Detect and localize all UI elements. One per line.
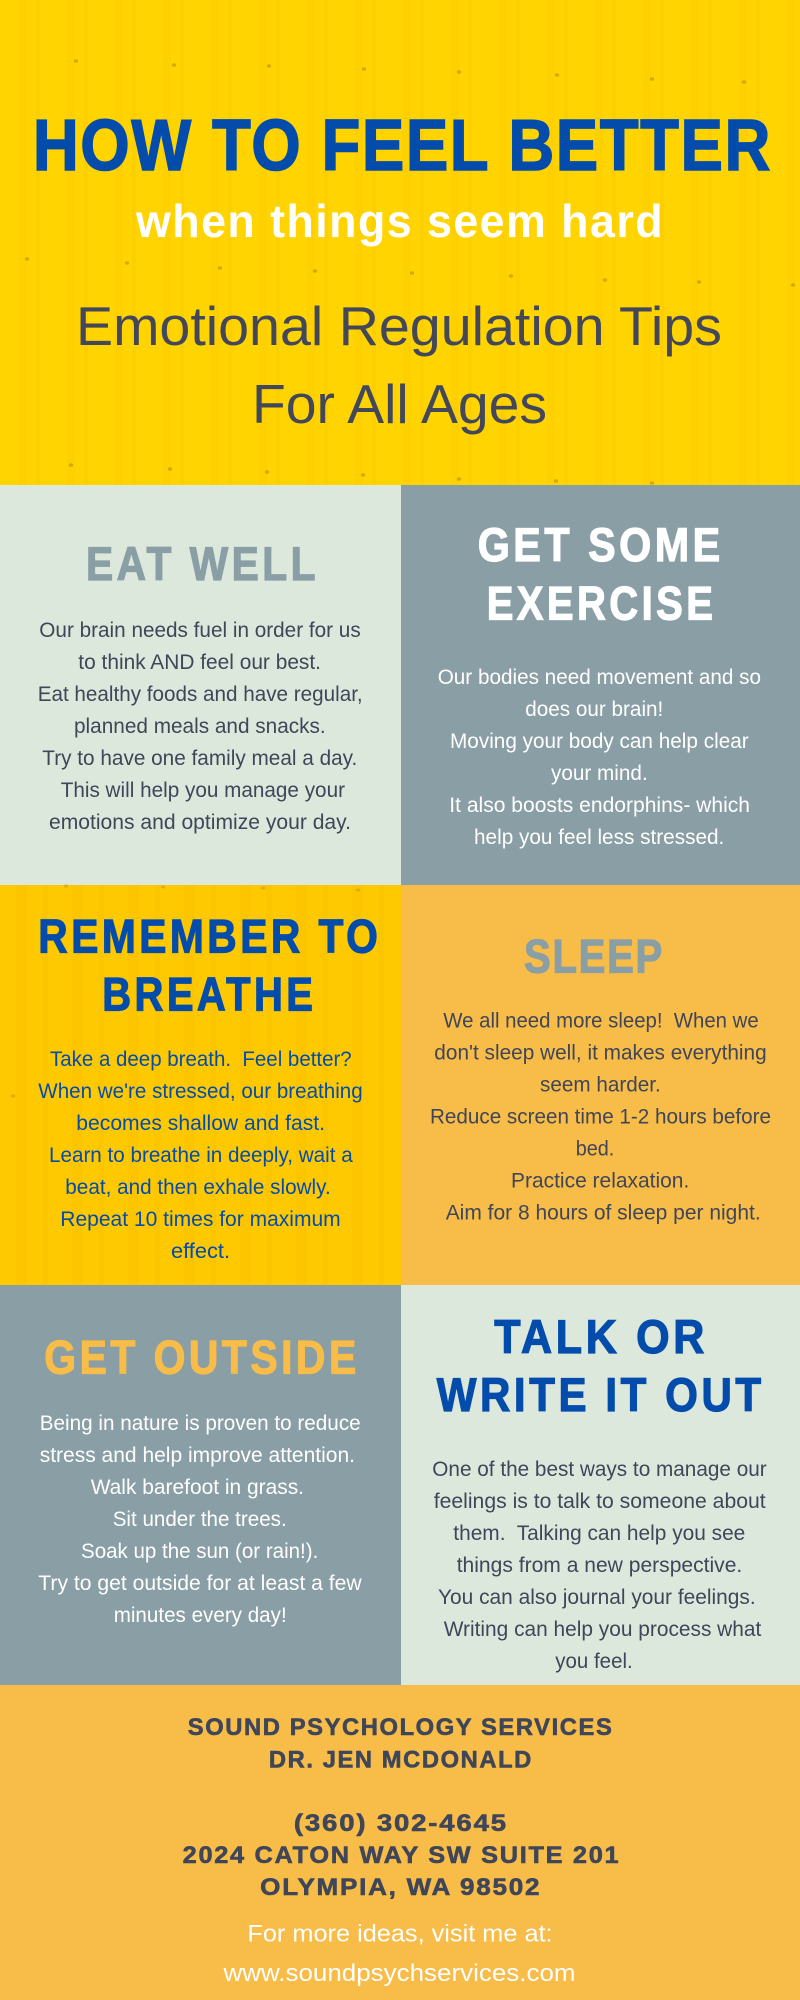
website callout: www.soundpsychservices.com [222,1960,576,1987]
sleep text: bed. [576,1136,614,1160]
talk text: things from a new perspective. [457,1553,742,1577]
exercise heading: GET SOME [478,518,724,571]
outside text: stress and help improve attention. [40,1443,355,1467]
talk text: them. Talking can help you see [453,1521,745,1545]
sleep background [401,885,800,1285]
phone and address: 2024 CATON WAY SW SUITE 201 [183,1842,620,1869]
breathe heading [38,910,381,1021]
eat well text: Our brain needs fuel in order for us [39,618,361,642]
sleep heading: SLEEP [524,930,664,983]
breathe text [38,1047,363,1263]
sleep text [430,1008,771,1224]
exercise text: It also boosts endorphins- which [449,793,750,817]
footer panel [0,1685,800,2000]
breathe text: beat, and then exhale slowly. [65,1175,331,1199]
eat well background [0,485,401,885]
outside text: minutes every day! [114,1603,287,1627]
practice name and doctor: SOUND PSYCHOLOGY SERVICES [188,1714,613,1741]
talk text: One of the best ways to manage our [432,1457,767,1481]
sleep text: Aim for 8 hours of sleep per night. [446,1200,761,1224]
website callout [222,1921,576,1987]
phone and address [183,1810,620,1901]
exercise heading: EXERCISE [487,576,716,629]
exercise text: your mind. [551,761,648,785]
sleep text: Reduce screen time 1-2 hours before [430,1104,771,1128]
practice name and doctor [188,1714,613,1774]
tagline [76,295,722,435]
breathe textured background [0,885,401,1285]
panel: sleep [401,885,800,1285]
eat well text: to think AND feel our best. [78,650,321,674]
outside text: Sit under the trees. [113,1507,287,1531]
tagline: Emotional Regulation Tips [76,295,722,357]
outside text: Being in nature is proven to reduce [40,1411,361,1435]
subtitle: when things seem hard [135,195,664,247]
outside background [0,1285,401,1685]
talk background [401,1285,800,1685]
exercise heading [478,518,724,629]
breathe text: Repeat 10 times for maximum [60,1207,341,1231]
eat well text: planned meals and snacks. [74,714,326,738]
breathe text: Learn to breathe in deeply, wait a [49,1143,353,1167]
exercise text: Our bodies need movement and so [438,665,761,689]
exercise background [401,485,800,885]
website callout: For more ideas, visit me at: [247,1921,553,1948]
breathe text: When we're stressed, our breathing [38,1079,363,1103]
panel: get some exercise [401,485,800,885]
phone and address: (360) 302-4645 [294,1810,508,1837]
sleep text: We all need more sleep! When we [443,1008,759,1032]
eat well text: This will help you manage your [61,778,345,802]
breathe text: becomes shallow and fast. [76,1111,325,1135]
panel: eat well [0,485,401,885]
hero panel [0,0,800,485]
talk heading [437,1310,765,1421]
hero rivet dots [25,59,795,485]
practice name and doctor: DR. JEN MCDONALD [269,1747,533,1774]
panel: remember to breathe [0,884,401,1285]
eat well heading: EAT WELL [86,537,319,590]
talk heading: WRITE IT OUT [437,1368,765,1421]
breathe heading: BREATHE [102,968,316,1021]
panel: get outside [0,1285,401,1685]
sleep text: Practice relaxation. [511,1168,689,1192]
talk text [432,1457,767,1673]
talk text: You can also journal your feelings. [438,1585,756,1609]
eat well text: emotions and optimize your day. [49,810,351,834]
talk text: feelings is to talk to someone about [434,1489,766,1513]
exercise text: does our brain! [525,697,663,721]
talk text: Writing can help you process what [444,1617,761,1641]
outside heading: GET OUTSIDE [44,1331,360,1384]
phone and address: OLYMPIA, WA 98502 [260,1874,541,1901]
outside text [38,1411,362,1627]
breathe text: Take a deep breath. Feel better? [50,1047,352,1071]
eat well text: Eat healthy foods and have regular, [38,682,363,706]
breathe rivet dots [11,884,360,1100]
breathe heading: REMEMBER TO [38,910,381,963]
sleep text: don't sleep well, it makes everything [434,1040,767,1064]
outside text: Walk barefoot in grass. [91,1475,304,1499]
breathe text: effect. [171,1239,230,1263]
eat well text [38,618,363,834]
hero textured yellow background [0,0,800,485]
exercise text [438,665,761,849]
exercise text: help you feel less stressed. [474,825,724,849]
sleep text: seem harder. [540,1072,661,1096]
panel: talk or write it out [401,1285,800,1685]
outside text: Soak up the sun (or rain!). [81,1539,318,1563]
tagline: For All Ages [252,373,547,435]
outside text: Try to get outside for at least a few [38,1571,362,1595]
talk text: you feel. [555,1649,633,1673]
exercise text: Moving your body can help clear [450,729,749,753]
footer background [0,1685,800,2000]
eat well text: Try to have one family meal a day. [42,746,357,770]
talk heading: TALK OR [494,1310,708,1363]
